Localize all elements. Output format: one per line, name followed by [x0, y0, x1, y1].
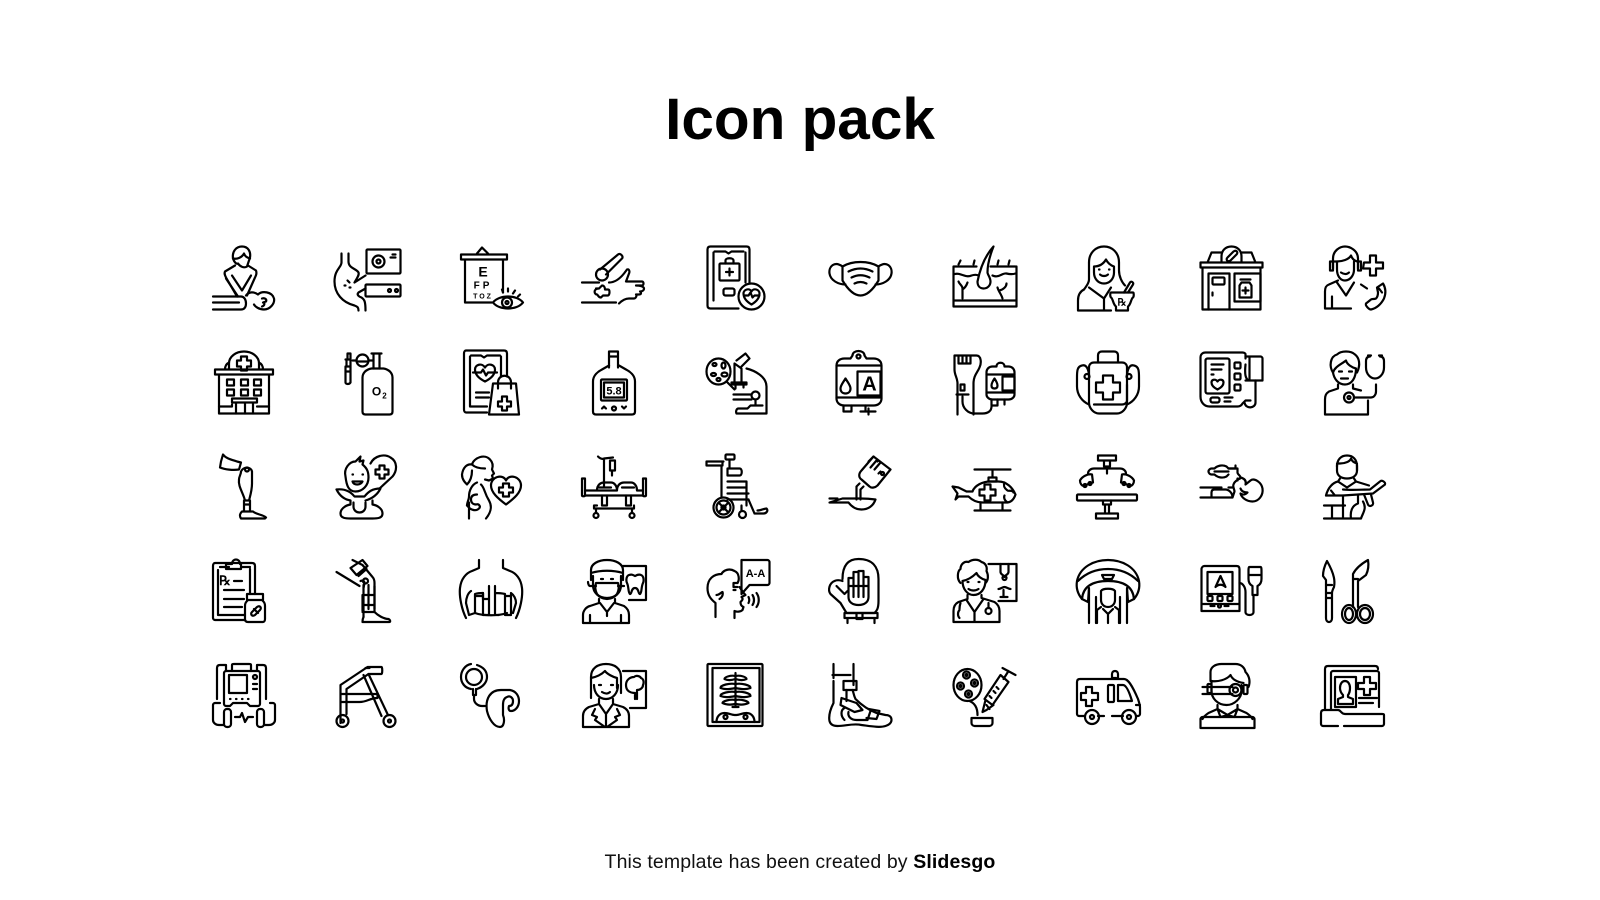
- icon: microscope: [706, 354, 766, 414]
- icon: oxygen cylinder: [346, 354, 392, 414]
- icon: stem cells syringe: [954, 668, 1016, 726]
- icon: blood pressure monitor: [1200, 352, 1262, 407]
- footer credit: This template has been created by Slidesgo: [605, 851, 995, 873]
- icon: orthopedist: [954, 560, 1016, 622]
- icon: prescription clipboard: [213, 560, 265, 622]
- icon: foot and ankle brace: [829, 664, 892, 727]
- icon: ultrasound machine: [1202, 566, 1262, 615]
- icon: eye chart: FP: [474, 280, 492, 292]
- icon: hospital bed: [582, 456, 646, 518]
- icon: doctor with stethoscope: [1325, 352, 1384, 414]
- icon: first aid backpack: [1077, 352, 1139, 414]
- icon: online pharmacy tablet: [464, 350, 519, 414]
- icon: rollator walker: [336, 667, 396, 727]
- icon: skin treatment hand: [582, 254, 644, 304]
- icon: back brace: [460, 560, 522, 618]
- icon: anesthesia bag: [1200, 465, 1263, 502]
- icon: blood bag A: A: [862, 374, 877, 396]
- icon: eye chart: TOZ: [473, 294, 493, 300]
- icon: chest x-ray: [708, 664, 762, 726]
- icon: ambulance: [1077, 671, 1140, 724]
- icon: eye chart: [461, 248, 523, 308]
- icon: glucose meter: 5.8: [606, 386, 622, 398]
- icon: CPR: [213, 246, 274, 310]
- icon: oxygen cylinder: 2: [382, 392, 387, 400]
- icon: hospital: [215, 352, 273, 414]
- icon: telemedicine nurse: [1325, 246, 1385, 310]
- icon: prosthetic leg: [220, 454, 266, 518]
- icon: medical app phone: [708, 246, 764, 310]
- icon: MRI scanner: [1077, 560, 1139, 623]
- icon: endoscopy patient: [1200, 664, 1254, 728]
- icon: blood transfusion arm: [954, 356, 1014, 414]
- icon: medical file folder: [1321, 666, 1384, 726]
- icon: air ambulance helicopter: [952, 470, 1016, 510]
- icon: speech therapy: [708, 560, 770, 618]
- icon: neurologist: [583, 664, 646, 727]
- icon: pharmacist: [1078, 246, 1134, 310]
- icon: blood bag A: [836, 351, 882, 414]
- icon: glucose meter: [593, 352, 635, 414]
- icon: liquid medicine spoon: [830, 456, 890, 510]
- icon: endoscopy: [334, 250, 400, 310]
- icon: wheelchair: [706, 454, 767, 518]
- icon: scalpel and scissors: [1323, 560, 1373, 623]
- icon: dentist: [583, 560, 646, 623]
- icon: prescription clipboard: ℞: [219, 573, 231, 588]
- icon: knee brace: [336, 560, 390, 622]
- icon: skin and hair follicle: [954, 246, 1016, 306]
- icon: operating table and lights: [1077, 456, 1137, 518]
- icon: cochlear implant: [461, 664, 519, 727]
- icon: defibrillator: [213, 664, 275, 727]
- icon: pregnancy heart: [462, 457, 521, 518]
- icon: oxygen cylinder: O: [372, 384, 381, 398]
- icon: eye chart: E: [478, 264, 488, 280]
- icon: pharmacist: ℞: [1118, 298, 1127, 308]
- title: Icon pack: [665, 87, 935, 152]
- icon: baby health: [336, 456, 396, 518]
- icon: pharmacy building: [1200, 246, 1262, 310]
- icon: speech therapy: A-A: [746, 568, 765, 580]
- icon: face mask: [829, 262, 892, 296]
- icon: hand brace glove: [829, 559, 878, 623]
- icon: leg traction nurse: [1324, 456, 1385, 518]
